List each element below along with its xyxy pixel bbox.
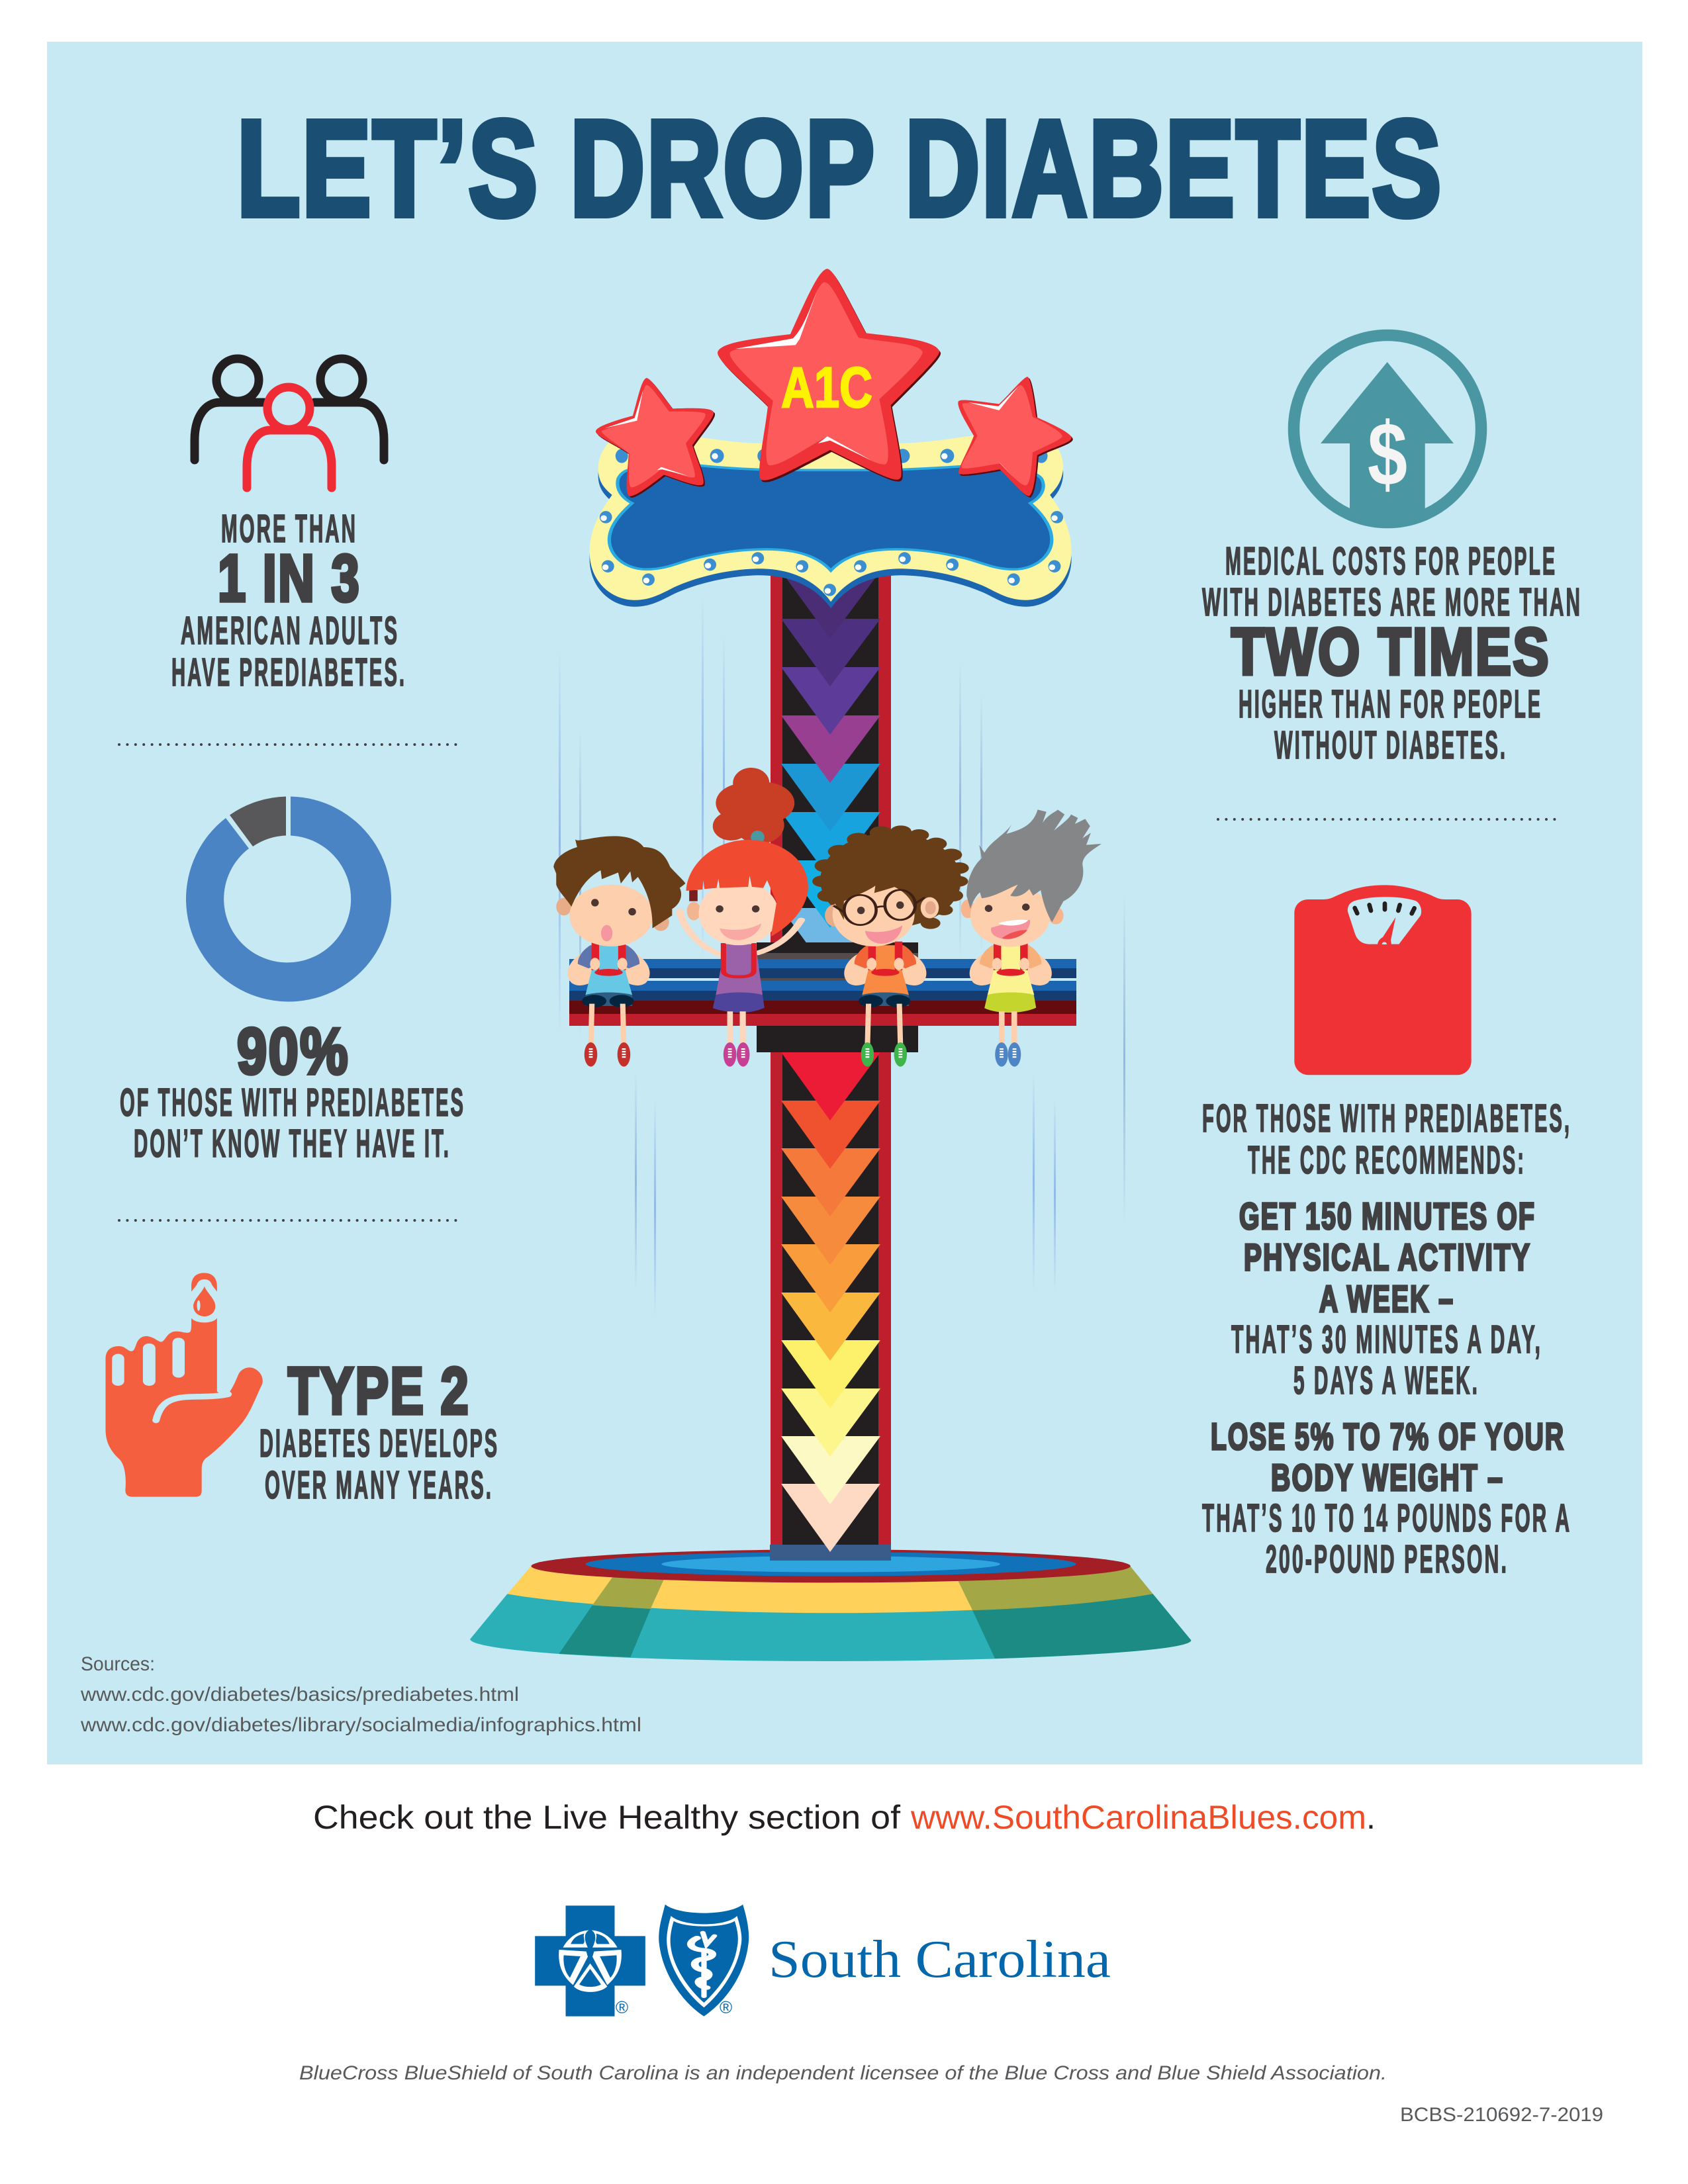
panel: medical costs statistic — [1202, 335, 1582, 767]
text: over many years: OVER MANY YEARS. — [265, 1463, 493, 1507]
panel: 90 percent statistic — [120, 797, 465, 1165]
icon: blue shield — [659, 1905, 749, 2017]
tower chevrons upper — [781, 571, 880, 976]
registered marks: ® — [616, 1997, 628, 2017]
text: physical activity: PHYSICAL ACTIVITY — [1244, 1236, 1531, 1279]
text: sources label: Sources: — [81, 1653, 155, 1675]
text: more than: MORE THAN — [221, 507, 357, 551]
panel: 90 percent statistic: DON’T KNOW THEY HAVE IT. — [134, 1122, 451, 1165]
icon: hand with blood drop — [105, 1273, 263, 1497]
star right — [958, 377, 1073, 498]
wordmark South Carolina: South Carolina — [769, 1931, 1111, 1989]
text: get 150 minutes of: GET 150 MINUTES OF — [1239, 1195, 1536, 1238]
kid four: girl with grey windblown hair — [961, 809, 1102, 1067]
disclaimer: BlueCross BlueShield of South Carolina is an independent licensee of the Blue Cross and Blue Shield Association. — [299, 2062, 1387, 2084]
icon: three people — [195, 359, 384, 488]
call to action line: www.SouthCarolinaBlues.com — [910, 1799, 1366, 1836]
text: 90%: 90% — [237, 1015, 350, 1087]
panel: light blue background — [47, 42, 1642, 1764]
dollar sign: $ — [1368, 404, 1407, 504]
panel: type 2 statistic — [105, 1273, 499, 1507]
text: 1 in 3: 1 IN 3 — [218, 541, 361, 615]
text: type 2: TYPE 2 — [288, 1354, 470, 1428]
registered marks — [616, 1997, 732, 2017]
call to action line: Check out the Live Healthy section of — [313, 1799, 900, 1836]
illustration: drop tower ride — [470, 269, 1191, 1661]
text: HAVE PREDIABETES. — [171, 651, 406, 694]
icon: blue cross — [535, 1905, 645, 2017]
registered marks: ® — [720, 1997, 732, 2017]
panel: 1 in 3 statistic — [171, 359, 406, 694]
icon: weighing scale — [1294, 885, 1472, 1075]
chart: donut 90 percent — [186, 797, 391, 1001]
logo: BlueCross BlueShield South Carolina — [535, 1905, 1111, 2017]
text: OF THOSE WITH PREDIABETES — [120, 1081, 465, 1124]
text: body weight: BODY WEIGHT – — [1271, 1457, 1504, 1499]
panel: sources — [80, 1653, 641, 1736]
text: source url one: www.cdc.gov/diabetes/basics/prediabetes.html — [80, 1684, 519, 1706]
text: american adults: AMERICAN ADULTS — [181, 609, 399, 653]
text: a week: A WEEK – — [1319, 1278, 1454, 1320]
icon: dollar up arrow in circle — [1293, 335, 1481, 523]
kid three: curly hair boy with glasses — [812, 825, 969, 1067]
text: 5 days a week: 5 DAYS A WEEK. — [1293, 1359, 1479, 1402]
star label A1C: A1C — [781, 356, 872, 420]
document code: BCBS-210692-7-2019 — [1400, 2104, 1603, 2126]
kid one: boy with brown hair — [553, 836, 685, 1067]
star left — [596, 378, 715, 498]
call to action line: . — [1366, 1799, 1376, 1836]
kid two: girl with red hair bun — [680, 768, 808, 1067]
text: two times: TWO TIMES — [1231, 615, 1550, 689]
panel: CDC recommendations — [1202, 885, 1571, 1581]
star centre — [718, 269, 941, 482]
text: source url two: www.cdc.gov/diabetes/library/socialmedia/infographics.html — [80, 1714, 641, 1736]
marquee sign — [590, 435, 1072, 608]
base platform — [470, 1549, 1191, 1661]
tower column — [770, 569, 891, 1561]
call to action line — [313, 1799, 1376, 1836]
tower chevrons lower — [781, 1052, 880, 1552]
seat carriage — [569, 942, 1076, 1052]
text: DIABETES DEVELOPS — [259, 1422, 499, 1465]
